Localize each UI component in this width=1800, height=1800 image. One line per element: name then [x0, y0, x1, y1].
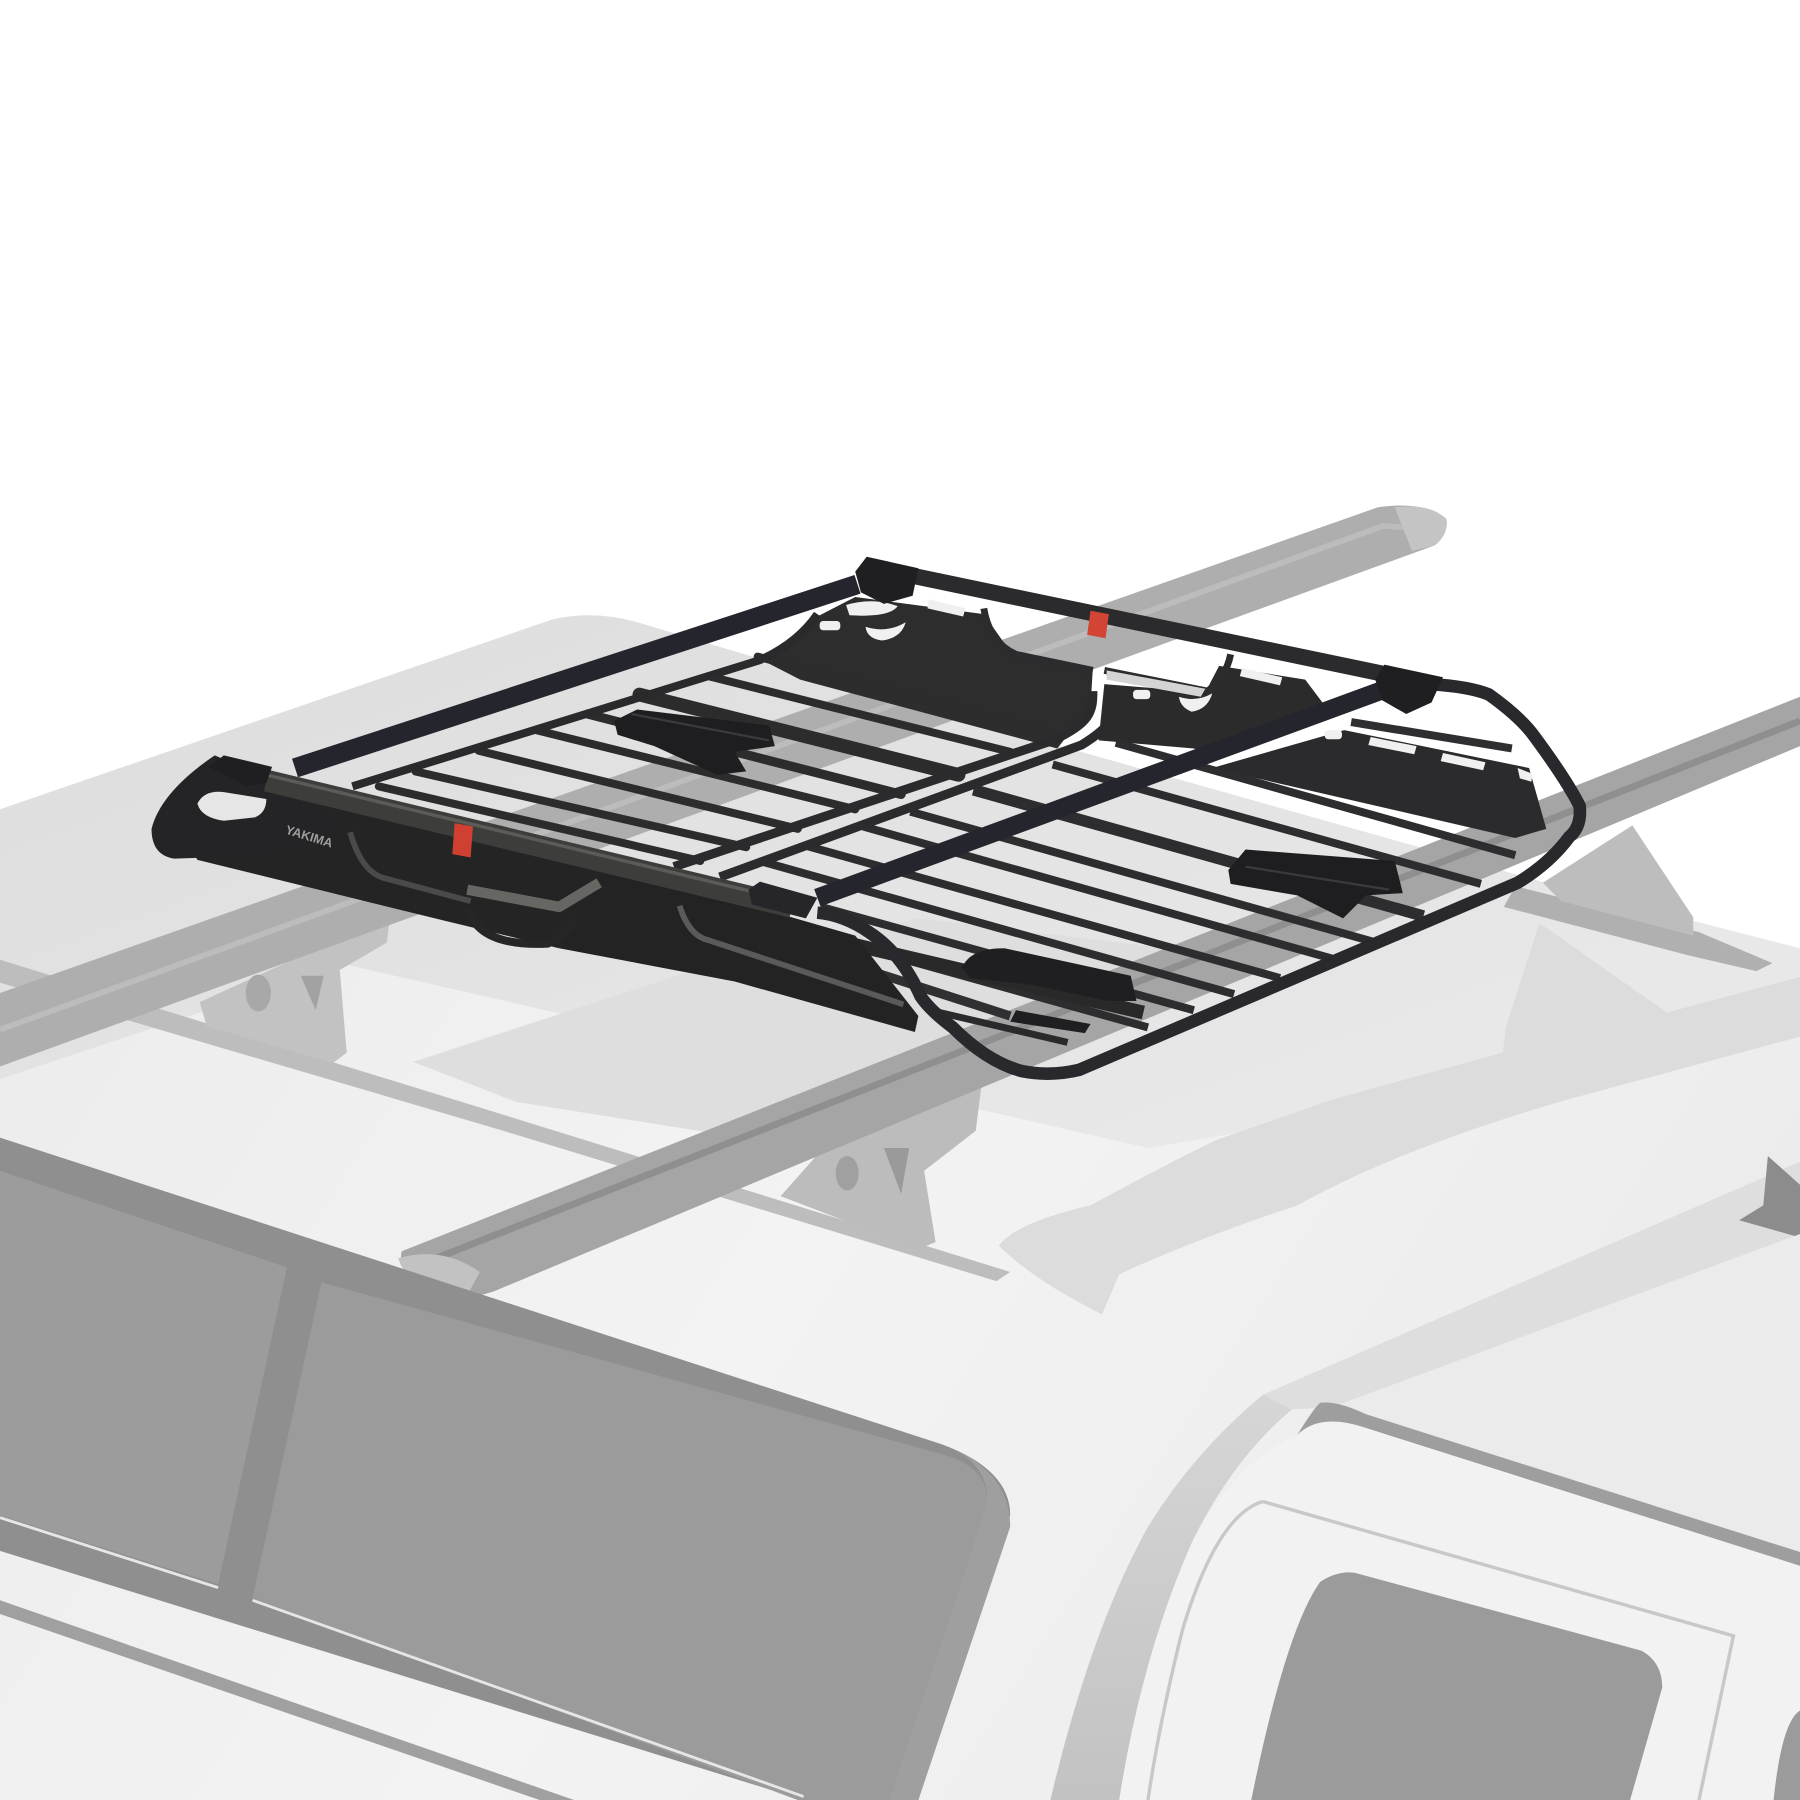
clamp: front right	[962, 948, 1136, 1033]
right crossbar foot rail	[1504, 886, 1772, 971]
basket floor slats: left half	[379, 657, 1056, 861]
left end handle opening	[197, 792, 266, 821]
clamp: rear right	[1228, 849, 1403, 918]
connector block: left	[209, 755, 272, 786]
outer hoop tube	[817, 684, 1580, 1074]
front fairing: right	[559, 872, 918, 1032]
cab foot at right edge	[1739, 1156, 1800, 1238]
cab roof and door	[1119, 1234, 1800, 1800]
cargo basket	[152, 557, 1580, 1074]
basket back panel: left	[762, 597, 1093, 748]
left window pane	[0, 1171, 287, 1584]
top cross tube: front	[817, 691, 1380, 898]
connector block: front	[748, 882, 817, 918]
connector block: right	[1375, 665, 1443, 714]
basket back panel: right	[1212, 730, 1546, 838]
window sill highlight	[0, 1518, 804, 1797]
roof shadow: right sweep	[999, 923, 1800, 1314]
panel top tubes	[984, 608, 1231, 691]
tower: right	[1543, 825, 1693, 936]
right bar under rail	[1351, 722, 1512, 748]
front strap loop	[467, 906, 574, 944]
top cross tube: rear	[295, 584, 858, 768]
front fairing: left	[180, 790, 611, 948]
centre cross beams	[674, 691, 1119, 877]
connector block: back	[855, 557, 918, 604]
long rail: front	[266, 775, 792, 907]
vehicle roof	[0, 615, 1800, 1800]
roof shadow: centre	[413, 918, 1205, 1136]
right window pane	[253, 1282, 987, 1800]
left end cap	[152, 755, 344, 859]
basket back panel: middle	[1099, 666, 1322, 755]
cab roof band	[1263, 1162, 1800, 1410]
lower front tubes	[800, 932, 1143, 1042]
tower: middle	[781, 1085, 982, 1249]
red band: back	[1087, 611, 1109, 638]
long rail: back	[915, 576, 1389, 675]
lower body trim	[0, 1600, 574, 1800]
tower: left	[200, 915, 390, 1063]
basket floor slats: right half	[760, 743, 1515, 1027]
red band: front	[452, 823, 473, 858]
rear window frame	[0, 1138, 1010, 1800]
crossbar: front	[398, 697, 1800, 1299]
panel handle: centre	[1107, 670, 1205, 697]
panel cut-outs	[820, 599, 1533, 782]
cab side window	[1251, 1572, 1662, 1800]
left floor edge bar	[352, 614, 817, 786]
crossbar: rear	[0, 506, 1447, 1066]
cab rear window sliver	[1774, 1710, 1800, 1800]
maker wordmark: YAKIMA	[284, 823, 334, 850]
front handle	[467, 883, 599, 907]
cap to cab pillar	[1050, 1395, 1291, 1800]
fairing tube highlight	[680, 906, 903, 1004]
clamp: rear left	[614, 709, 775, 775]
rear crossbar rail	[0, 960, 1010, 1281]
